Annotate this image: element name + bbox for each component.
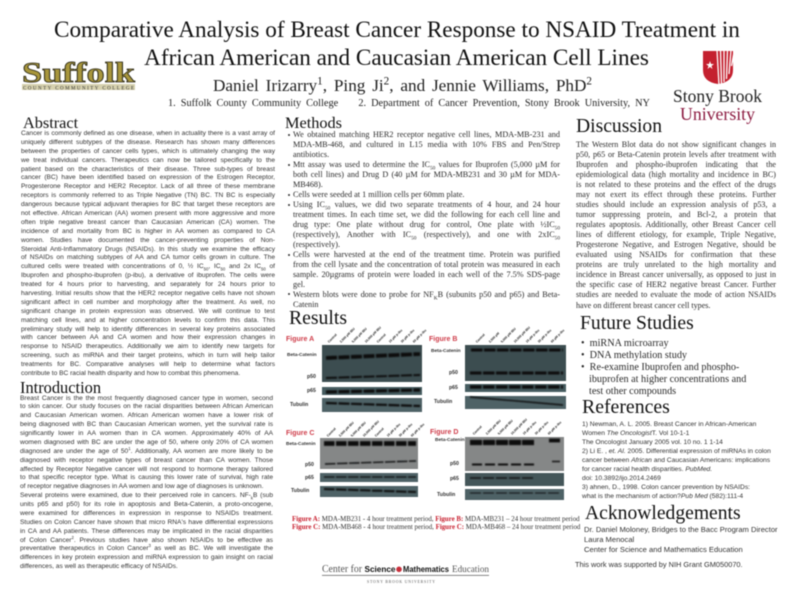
- figure D blot: p50: [450, 461, 459, 467]
- logo: Center for Science and Mathematics Education: Science: [364, 564, 396, 574]
- text block: introduction: in CA and AA patients. These differences may be implicated in the racial disparities: [20, 528, 273, 535]
- figure A blot: 60 µM p-ibu: [412, 328, 427, 344]
- text block: abstract: not effective. African American (AA) women present with more aggressive and more: [21, 210, 275, 217]
- figure A blot: [286, 325, 427, 412]
- figure captions: Figure C: MDA-MB468 - 4 hour treatment period, Figure C: MDA-MB468 – 24 hour treatment period: [292, 524, 580, 531]
- heading: future studies: Future Studies: [580, 313, 694, 334]
- text block: abstract: between the properties of cancer cells types, which is ultimately changing the way: [21, 148, 275, 155]
- text block: introduction: of receptor negative diagnoses in AA women and low age of diagnoses is unknown.: [20, 483, 263, 490]
- text block: discussion: evaluated using NSAIDs for confirmation that these: [576, 250, 776, 259]
- logo: Stony Brook University: Stony Brook: [673, 86, 762, 106]
- affiliations: 1. Suffolk County Community College 2. Department of Cancer Prevention, Stony Brook University, NY: [168, 98, 650, 109]
- figure A blot: Control: [327, 333, 338, 344]
- panel: future studies: [580, 313, 747, 398]
- list: future studies: [580, 338, 747, 398]
- figure D blot: 60 µM p-ibu: [547, 420, 562, 436]
- figure D blot: p65: [450, 476, 459, 482]
- heading: acknowledgements: Acknowledgements: [585, 503, 741, 524]
- text block: abstract: Ibuprofen and phospho-ibuprofen (p-ibu), a derivative of ibuprofen. The cells were: [21, 272, 275, 279]
- text block: abstract: with cancer between AA and CA women and how their expression changes in: [21, 334, 275, 341]
- text block: abstract: treated for 4 hours prior to harvesting, and separately for 24 hours prior to: [21, 281, 275, 288]
- text block: discussion: is not related to these proteins and the effect of the drugs: [576, 180, 776, 189]
- figure A blot: p65: [307, 388, 316, 394]
- figure A blot: p50: [307, 374, 316, 380]
- text block: methods list: sample. 20µgrams of protein were loaded in each well of the 7.5% SDS-page: [293, 270, 560, 279]
- text block: discussion: studies are needed to evaluate the mode of action NSAIDs: [576, 290, 776, 299]
- text block: abstract: Cancer is commonly defined as one disease, when in actuality there is a vast array of: [21, 130, 275, 137]
- text block: abstract: matching cell lines, and at higher concentration levels to confirm this data. This: [21, 317, 275, 324]
- text block: abstract: significant change in protein expression was observed. We will continue to test: [21, 308, 275, 315]
- text block: references: The Oncologist January 2005 vol. 10 no. 1 1-14: [582, 439, 723, 446]
- text block: abstract: women. Studies have documented the cancer-preventing properties of Non-: [21, 237, 275, 244]
- text block: abstract: patient based on the characteristics of their disease. Three sub-types of breast: [21, 166, 275, 173]
- text block: introduction: to that specific receptor type. What is causing this lower rate of survival, high rate: [20, 474, 273, 481]
- text block: abstract: contribute to BC racial health disparity and how to combat this phenomena.: [21, 370, 240, 377]
- figure A blot: Control: [376, 333, 387, 344]
- list: future studies: • miRNA microarray: [581, 338, 669, 349]
- text block: abstract: cultured cells were treated with concentrations of 0, ½ IC50, IC50 and 2x IC50 of: [21, 263, 275, 272]
- logo: Center for Science and Mathematics Education: Education: [452, 565, 489, 575]
- figure C blot: Control: [326, 427, 337, 438]
- figure C blot: p65: [305, 475, 314, 481]
- text block: discussion: Progesterone Negative, and Estrogen Negative, should be: [576, 240, 776, 249]
- figure B blot: Control: [475, 333, 486, 344]
- text block: abstract: response to NSAID therapeutics. Additionally we aim to identify new targets for: [21, 343, 275, 350]
- figure B blot: 2,500 µM: [488, 331, 500, 344]
- text block: references: what is the mechanism of action?Pub Med (582):111-4: [582, 492, 743, 500]
- icon: red shield: [703, 50, 734, 85]
- text block: discussion: incidence in Breast cancer universally, as opposed to just in: [576, 270, 776, 279]
- text block: references: [582, 420, 772, 500]
- text block: references: doi: 10.3892/ijo.2014.2469: [582, 475, 661, 482]
- figure B blot: Figure B: [429, 336, 457, 343]
- logo: Stony Brook University: University: [680, 104, 755, 124]
- figure C blot: Control: [374, 427, 385, 438]
- figure A blot: Figure A: [286, 336, 314, 343]
- figure C blot: 60 µM p-ibu: [410, 422, 425, 438]
- text block: methods list: Mtt assay was used to determine the IC50 values for Ibuprofen (5,000 µM for: [293, 160, 560, 172]
- figure A blot: 5,000 µM IBU: [351, 326, 368, 344]
- figure C blot: 30 µM p-ibu: [398, 422, 413, 438]
- list: future studies: • DNA methylation study: [581, 350, 687, 361]
- text block: references: 1) Newman, A. L. 2005. Breast Cancer in African-American: [582, 421, 756, 428]
- text block: abstract: incidence of and mortality from BC is higher in AA women as compared to CA: [21, 228, 275, 235]
- figure D blot: Tubulin: [437, 492, 455, 498]
- text block: discussion: may not exert its effect through these proteins. Further: [576, 190, 776, 199]
- figure C blot: 15 µM p-ibu: [386, 422, 401, 438]
- figure D blot: Figure D: [430, 429, 458, 436]
- text block: introduction: of Colon Cancer2. Previous studies have also shown NSAIDs to be effective as: [20, 534, 273, 544]
- text block: methods list: (respectively), Another with IC50 (respectively), and one with 2xIC50: [293, 230, 560, 241]
- figure B blot: 30 µM p-ibu: [537, 328, 552, 344]
- text block: abstract: dangerous because typical adjuvant therapies for BC that target these receptors are: [21, 201, 275, 208]
- text block: references: Women The OncologistT. Vol 10-1-1: [582, 430, 689, 437]
- text block: references: cancer between African and Caucasian Americans: implications: [582, 457, 770, 464]
- text block: methods list: Catenin: [293, 300, 318, 308]
- logo: Stony Brook University: [673, 50, 762, 125]
- text block: methods list: drug type: One plate without drug for control, One plate with ½IC50: [293, 220, 560, 232]
- text block: discussion: studies should include an expression analysis of p53, a: [576, 200, 776, 209]
- text block: introduction: being diagnosed with BC than Caucasian American women, yet the survival rate is: [20, 421, 273, 428]
- text block: abstract: often triple negative breast cancer than Caucasian American (CA) women. The: [21, 219, 275, 226]
- figure A blot: Beta-Catenin: [287, 352, 317, 358]
- text block: discussion: lines of different etiology, for example, Triple Negative,: [576, 230, 776, 239]
- figure C blot: [286, 419, 425, 497]
- figure B blot: 5,000 µM IBU: [500, 326, 517, 344]
- text block: abstract: uniquely different subtypes of the disease. Research has shown many differences: [21, 139, 275, 146]
- text block: abstract: significant affect in cell number and morphology after the treatment. As well, no: [21, 299, 275, 306]
- text block: abstract: cancer (BC) have been identified based on expression of the Estrogen Receptor,: [21, 174, 275, 181]
- figure B blot: Tubulin: [434, 399, 452, 405]
- text block: introduction: differences, as well as therapeutic efficacy of NSAIDs.: [20, 563, 178, 570]
- heading: results: Results: [289, 307, 347, 329]
- logo: Center for Science and Mathematics Education: [322, 564, 490, 584]
- text block: methods list: Using IC50 values, we did two separate treatments of 4 hour, and 24 hour: [293, 200, 560, 212]
- text block: methods list: Western blots were done to probe for NFKB (subunits p50 and p65) and Beta-: [293, 290, 560, 301]
- text block: discussion: epidemiological data (high mortality and incidence in BC): [576, 170, 776, 179]
- heading: introduction: Introduction: [20, 378, 101, 397]
- figure C blot: 5,000 µM IBU: [350, 420, 367, 438]
- text block: introduction: affected by Receptor Negative cancer will not respond to hormone therapy tailored: [20, 466, 273, 472]
- title: Comparative Analysis of Breast Cancer Response to NSAID Treatment in: [54, 17, 740, 43]
- text block: discussion: tumor suppressing protein, and Bcl-2, a protein that: [576, 210, 776, 219]
- figure B blot: [429, 325, 566, 409]
- heading: methods: Methods: [285, 113, 342, 132]
- text block: methods list: [292, 130, 561, 308]
- panel: discussion: [575, 116, 776, 311]
- list: future studies: ibuprofen at higher concentrations and: [589, 374, 746, 385]
- panel: abstract: [20, 113, 276, 378]
- text block: discussion: The Western Blot data do not show significant changes in: [576, 140, 776, 149]
- figure B blot: p65: [449, 385, 458, 391]
- text block: discussion: p50, p65 or Beta-Catenin protein levels after treatment with: [576, 150, 776, 159]
- figure D blot: 30 µM p-ibu: [534, 420, 549, 436]
- figure B blot: 60 µM p-ibu: [550, 328, 565, 344]
- title: [54, 17, 740, 71]
- figure A blot: 2,500 µM IBU: [339, 326, 356, 344]
- text block: introduction: differences in key protein expression and miRNA expression to gain insight on racial: [20, 554, 273, 561]
- text block: methods list: from the cell lysate and the concentration of total protein was measured in each: [293, 260, 560, 269]
- text block: acknowledgements: Center for Science and Mathematics Education: [584, 545, 743, 554]
- logo: Center for Science and Mathematics Education: STONY BROOK UNIVERSITY: [367, 580, 435, 584]
- list: future studies: • Re-examine Ibuprofen and phospho-: [581, 362, 739, 373]
- text block: introduction: preventative therapeutics in Colon Cancer3 as well as BC. We will investigate the: [20, 543, 273, 552]
- figure A blot: 10,000 µM IBU: [364, 325, 382, 344]
- text block: introduction: [19, 394, 274, 570]
- text block: introduction: Several proteins were examined, due to their perceived role in cancers. NF-kB (sub: [20, 492, 273, 500]
- text block: discussion: regulates apoptosis. Additionally, other Breast Cancer cell: [576, 220, 776, 229]
- authors: Daniel Irizarry1, Ping Ji2, and Jennie Williams, PhD2: [213, 75, 592, 95]
- text block: methods list: (respectively).: [293, 240, 340, 249]
- text block: methods list: gel.: [293, 280, 305, 289]
- logo: Suffolk County Community College: Suffolk: [22, 57, 136, 89]
- figure C blot: 2,500 µM IBU: [338, 420, 355, 438]
- figure captions: Figure A: MDA-MB231 - 4 hour treatment period, Figure B: MDA-MB231 – 24 hour treatment period: [292, 516, 580, 523]
- figure D blot: Control: [472, 425, 483, 436]
- text block: abstract: preliminary study will help to identify differences in several key proteins associated: [21, 326, 275, 333]
- figure D blot: [430, 417, 564, 500]
- figure C blot: 10,000 µM IBU: [362, 419, 380, 438]
- figure C blot: p50: [305, 462, 314, 468]
- text block: introduction: and Caucasian American women. African American women have a lower risk of: [20, 412, 273, 419]
- text block: discussion: proteins are truly unrelated to the high mortality and: [576, 260, 776, 269]
- text block: methods list: Cells were harvested at the end of the treatment time. Protein was purified: [293, 250, 560, 259]
- text block: abstract: receptors is commonly referred to as Triple Negative (TN) BC. TN BC is especially: [21, 192, 275, 199]
- text block: discussion: have on different breast cancer cell types.: [576, 300, 710, 310]
- heading: discussion: Discussion: [576, 116, 662, 137]
- panel: references: [582, 396, 772, 500]
- logo: Suffolk County Community College: COUNTY COMMUNITY COLLEGE: [23, 86, 134, 91]
- text block: abstract: [20, 130, 276, 378]
- text block: abstract: treatments for BC. Comparative analyses will help to determine what factors: [21, 361, 275, 368]
- figure D blot: 2,500 µM IBU: [485, 418, 502, 436]
- text block: methods list: Cells were seeded at 1 million cells per 60mm plate.: [293, 190, 464, 199]
- figure C blot: Beta-Catenin: [286, 441, 316, 447]
- text block: abstract: Steroidal Anti-Inflammatory Drugs (NSAIDs). In this study we examine the efficacy: [21, 246, 275, 253]
- text block: introduction: diagnosed with receptor negative types of breast cancer than CA women. Those: [20, 457, 273, 464]
- list: future studies: test other compounds: [589, 386, 676, 397]
- text block: methods list: MDA-MB-468, and cultured in L15 media with 10% FBS and Pen/Strep: [293, 140, 560, 149]
- logo: Center for Science and Mathematics Education: Center for: [322, 564, 363, 575]
- text block: introduction: to skin cancer. Our study focuses on the racial disparities between African American: [20, 403, 273, 410]
- text block: methods list: both cell lines) and Drug D (40 µM for MDA-MB231 and 30 µM for MDA-: [293, 170, 560, 179]
- figure B blot: 15 µM p-ibu: [525, 328, 540, 344]
- text block: abstract: harvesting. Initial results show that the HER2 receptor negative cells have not shown: [21, 290, 275, 297]
- figure D blot: 5,000 µM IBU: [497, 418, 514, 436]
- panel: introduction: [19, 378, 274, 570]
- text block: methods list: treatment times. In each time set, we did the following for each cell line and: [293, 210, 560, 219]
- funding note: This work was supported by NIH Grant GM050070.: [575, 560, 743, 569]
- text block: discussion: Ibuprofen and phospho-ibuprofen indicating that the: [576, 160, 776, 169]
- text block: references: for cancer racial health disparities. PubMed.: [582, 466, 712, 473]
- text block: introduction: women diagnosed with BC are under the age of 50, where only 20% of CA women: [20, 439, 273, 446]
- text block: introduction: units p65 and p50) for its role in apoptosis and Beta-Catenin, a proto-oncogene,: [20, 501, 273, 508]
- panel: methods: [285, 113, 561, 308]
- heading: abstract: Abstract: [23, 113, 78, 132]
- figure A blot: Tubulin: [290, 402, 308, 408]
- text block: acknowledgements: Laura Menocal: [584, 535, 634, 544]
- figure A blot: 15 µM p-ibu: [388, 328, 403, 344]
- text block: discussion: [575, 140, 776, 311]
- figure B blot: Beta-Catenin: [431, 348, 461, 354]
- text block: discussion: the specific case of HER2 negative breast Cancer. Further: [576, 280, 776, 289]
- figure B blot: 10,000 µM IBU: [513, 325, 531, 344]
- text block: abstract: Progesterone Receptor and HER2 Receptor. Lack of all three of these membrane: [21, 183, 275, 190]
- text block: abstract: of NSAIDs on matching subtypes of AA and CA tumor cells grown in culture. The: [21, 254, 275, 261]
- figure D blot: Beta-Catenin: [435, 437, 465, 443]
- text block: introduction: significantly lower in AA women than in CA women. Approximately 40% of AA: [20, 430, 273, 437]
- figure D blot: 10,000 µM IBU: [510, 417, 528, 436]
- text block: abstract: screening, such as miRNA and their target proteins, which in turn will help tailor: [21, 352, 275, 359]
- logo: Center for Science and Mathematics Education: Mathematics: [403, 564, 449, 574]
- figure A blot: 30 µM p-ibu: [400, 328, 415, 344]
- icon: method bullets: [287, 133, 291, 296]
- text block: introduction: were examined for differences in expression in response to NSAIDs treatment.: [20, 510, 273, 517]
- heading: references: References: [582, 396, 670, 418]
- text block: introduction: Breast Cancer is the the most frequently diagnosed cancer type in women, second: [20, 394, 273, 402]
- text block: introduction: diagnosed are under the age of 501. Additionally, AA women are more likely to be: [20, 446, 273, 455]
- figure B blot: p50: [449, 370, 458, 376]
- panel: acknowledgements: [574, 503, 778, 570]
- text block: acknowledgements: Dr. Daniel Moloney, Bridges to the Bacc Program Director: [584, 525, 778, 534]
- figure D blot: 15 µM p-ibu: [522, 420, 537, 436]
- figure captions: [292, 515, 581, 532]
- text block: acknowledgements: [584, 525, 778, 554]
- text block: introduction: Studies on Colon Cancer have shown that micro RNA's have differential expressions: [20, 519, 273, 526]
- text block: references: 3) ahnen, D., 1998. Colon cancer prevention by NSAIDs:: [582, 484, 750, 491]
- figure C blot: Tubulin: [291, 488, 309, 494]
- text block: methods list: We obtained matching HER2 receptor negative cell lines, MDA-MB-231 and: [293, 130, 560, 139]
- title: African American and Caucasian American Cell Lines: [144, 45, 649, 71]
- text block: references: 2) Li E. , et. Al. 2005. Differential expression of miRNAs in colon: [582, 448, 771, 455]
- figure C blot: Figure C: [286, 430, 314, 437]
- text block: abstract: we treat individual cancers. Therapeutics can now be tailored specifically to the: [21, 157, 275, 164]
- text block: methods list: MB468).: [293, 180, 323, 189]
- text block: methods list: antibiotics.: [293, 150, 329, 159]
